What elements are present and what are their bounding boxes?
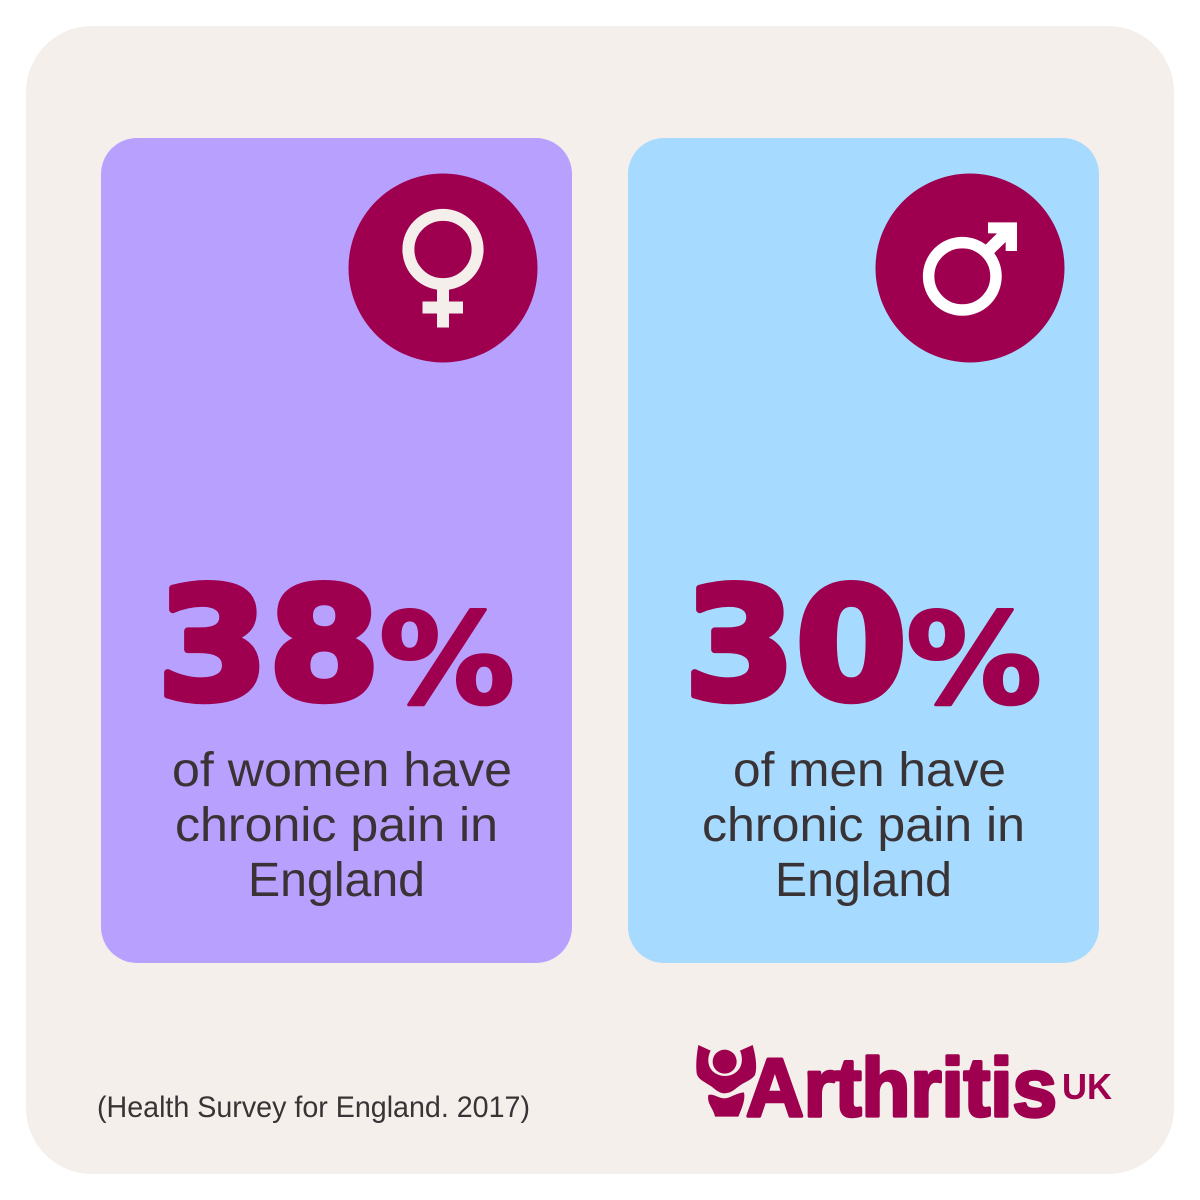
men panel background [628,138,1099,963]
icon: female symbol [348,174,538,362]
panel: men [628,138,1099,963]
text: men description: of men have [733,744,1006,797]
statistic: 30% [684,554,1042,736]
source citation: (Health Survey for England. 2017) [97,1091,530,1124]
statistic: 38%: 38 [157,554,380,736]
icon: logo figure [696,1045,756,1117]
women panel background [101,138,572,963]
text: women description: of women have [172,744,512,797]
statistic: 30%: 30 [684,554,907,736]
logo: Arthritis UK [696,1041,1112,1134]
statistic: 38%: % [379,586,515,733]
text: men description [702,744,1025,907]
text: women description: chronic pain in [175,799,498,852]
text: women description [172,744,512,907]
text: men description: England [775,854,952,907]
statistic: 30%: % [906,586,1042,733]
logo wordmark: Arthritis [746,1041,1057,1134]
icon: male symbol [876,174,1064,362]
text: women description: England [248,854,425,907]
logo UK mark: UK [1062,1066,1112,1107]
panel: women [101,138,572,963]
statistic: 38% [157,554,515,736]
text: men description: chronic pain in [702,799,1025,852]
